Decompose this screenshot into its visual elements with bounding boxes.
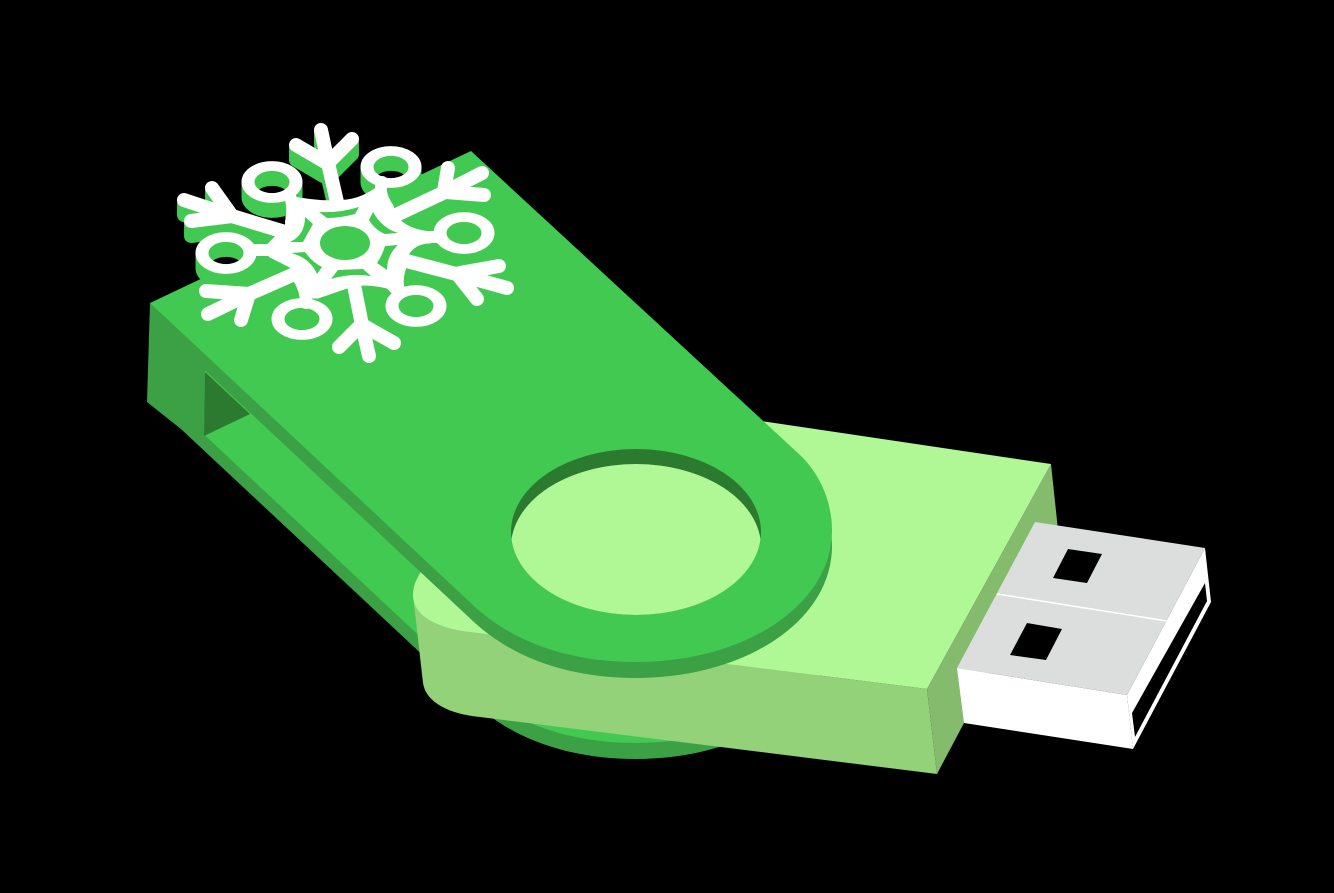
plate top — [150, 151, 832, 662]
connector side — [1127, 548, 1211, 749]
connector opening — [1132, 583, 1207, 737]
slot shadow — [204, 372, 250, 436]
plate edge — [150, 167, 832, 678]
connector top — [957, 522, 1205, 695]
left end face — [147, 303, 205, 450]
case front side — [413, 595, 937, 774]
connector front — [957, 668, 1133, 749]
lower swivel plate — [150, 232, 832, 759]
USB connector — [957, 522, 1211, 749]
swivel hole — [511, 449, 761, 630]
connector hole front — [1010, 623, 1062, 660]
illustration: green swivel USB drive — [147, 123, 1211, 774]
drive body: light green case — [413, 412, 1058, 774]
snowflake inner cutouts — [290, 207, 398, 279]
case top — [413, 412, 1051, 689]
snowflake extrusion — [184, 133, 507, 371]
case right side — [927, 464, 1058, 774]
icon: snowflake logo — [184, 130, 507, 371]
upper swivel plate — [147, 151, 832, 678]
connector hole rear — [1053, 549, 1102, 583]
